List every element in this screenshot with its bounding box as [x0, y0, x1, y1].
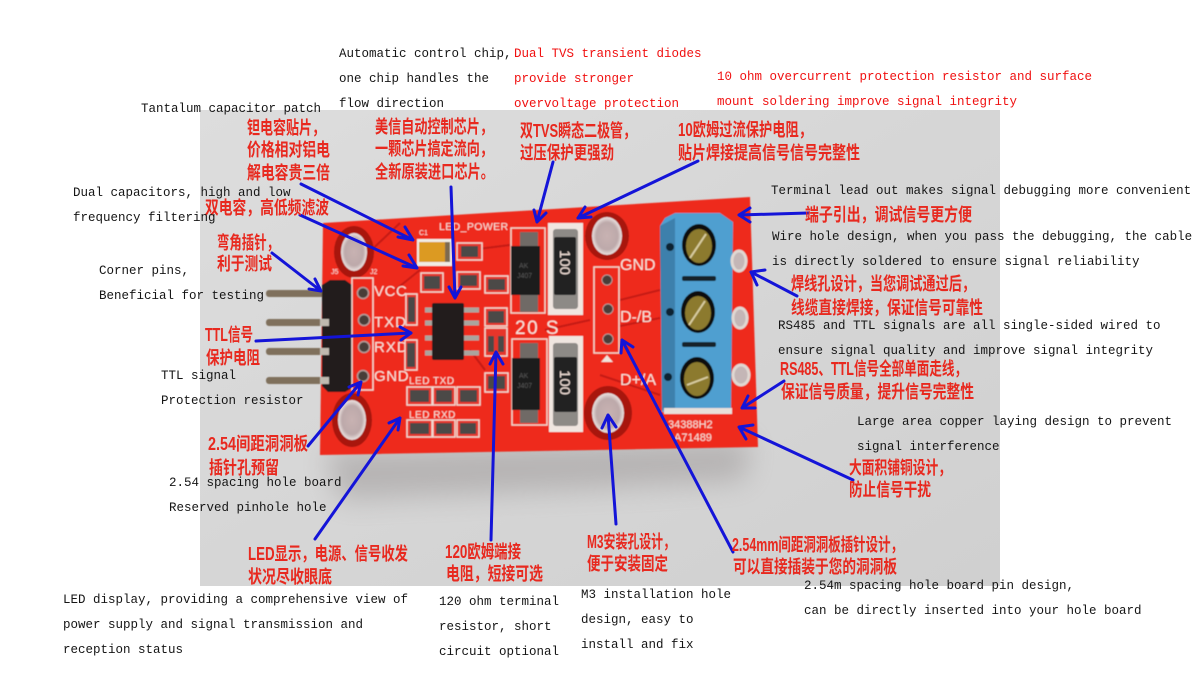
J2 silkscreen and pads: RXD: [374, 339, 409, 356]
red circuit board: [266, 197, 758, 455]
annotation: TVS: 双TVS瞬态二极管，: [520, 120, 636, 141]
annotation: TTL resistor: 保护电阻: [206, 348, 260, 368]
annotation: LED display: [248, 543, 408, 587]
J2 silkscreen and pads: J5: [331, 269, 338, 276]
caption: M3 hole: [581, 588, 731, 652]
arrow: control chip: [449, 187, 461, 298]
power resistors: 100: [556, 250, 573, 275]
TVS diodes: AK: [519, 373, 529, 380]
caption: hole board pins: Reserved pinhole hole: [169, 501, 327, 515]
caption: TTL resistor: [161, 369, 304, 408]
caption: control chip: Automatic control chip,: [339, 47, 512, 61]
TVS diodes: AK: [519, 263, 529, 270]
annotation: copper area: 防止信号干扰: [849, 479, 931, 500]
annotation: copper area: [849, 458, 951, 500]
J2 silkscreen and pads: J2: [370, 269, 378, 276]
annotation: hole board pins: 插针孔预留: [209, 457, 279, 478]
power resistors: 100: [556, 370, 573, 395]
caption: LED display: power supply and signal transmission and: [63, 618, 363, 632]
caption: copper area: signal interference: [857, 440, 1000, 454]
caption: TVS diodes: overvoltage protection: [514, 97, 679, 111]
annotation: RS485 routing: 保证信号质量，提升信号完整性: [781, 381, 974, 402]
arrow: dual capacitors: [300, 215, 417, 268]
annotation: 2.54mm pin design: [732, 535, 903, 577]
caption: control chip: one chip handles the: [339, 72, 489, 86]
annotation: hole board pins: [208, 434, 308, 478]
caption: TTL resistor: Protection resistor: [161, 394, 304, 408]
annotation: terminal resistor: [445, 541, 543, 584]
caption: hole board pins: [169, 476, 342, 515]
annotation: M3 hole: M3安装孔设计，: [587, 532, 675, 552]
annotation: control chip: [375, 116, 494, 182]
TVS diodes: [511, 228, 547, 425]
annotation: control chip: 一颗芯片搞定流向，: [375, 138, 493, 159]
caption: TVS diodes: Dual TVS transient diodes: [514, 47, 702, 61]
board silkscreen labels: 34388H2: [668, 419, 713, 431]
caption: control chip: flow direction: [339, 97, 444, 111]
tantalum capacitor: LED_POWER: [439, 221, 509, 233]
annotation: TVS: 过压保护更强劲: [520, 143, 614, 163]
caption: LED display: LED display, providing a comprehensive view of: [63, 593, 408, 607]
arrow: corner pins: [272, 253, 321, 291]
caption: overcurrent resistor: 10 ohm overcurrent protection resistor and surface: [717, 70, 1092, 84]
mounting holes: [332, 212, 632, 447]
annotation: wire hole: 线缆直接焊接，保证信号可靠性: [791, 297, 983, 318]
board silkscreen labels: GND: [620, 257, 656, 274]
annotation: RS485 routing: RS485、TTL信号全部单面走线，: [780, 358, 967, 379]
caption: terminal resistor: [439, 595, 559, 659]
annotation: terminal lead out: 端子引出，调试信号更方便: [805, 204, 972, 225]
annotation: RS485 routing: [780, 358, 974, 402]
board shadow: [325, 440, 750, 500]
board silkscreen labels: 20 S: [515, 318, 560, 339]
caption: 2.54m pin design: [804, 579, 1142, 618]
board silkscreen labels: LED RXD: [409, 410, 456, 421]
annotation: corner pins: 弯角插针，: [217, 232, 279, 253]
annotation: control chip: 美信自动控制芯片，: [375, 116, 493, 137]
wire solder holes: [732, 251, 749, 385]
power resistors: [548, 223, 583, 432]
annotation: terminal resistor: 120欧姆端接: [445, 541, 521, 562]
pin header: [266, 280, 352, 392]
TVS diodes: J407: [517, 273, 532, 280]
caption: control chip: [339, 47, 512, 111]
annotation: TVS: [520, 120, 636, 163]
caption: M3 hole: design, easy to: [581, 613, 694, 627]
caption: overcurrent resistor: mount soldering improve signal integrity: [717, 95, 1018, 109]
arrow: tantalum capacitor: [301, 184, 413, 240]
J2 silkscreen and pads: [331, 269, 409, 390]
photo background: [200, 110, 1000, 586]
red Chinese annotations: [205, 116, 983, 587]
annotation: TTL resistor: [205, 325, 260, 368]
caption: terminal resistor: circuit optional: [439, 645, 559, 659]
annotation: tantalum capacitor: 解电容贵三倍: [247, 162, 330, 183]
caption: dual capacitors: Dual capacitors, high and low: [73, 186, 291, 200]
annotation: M3 hole: [587, 532, 675, 574]
arrow: TVS diodes: [534, 162, 553, 222]
blue arrows: [256, 161, 853, 552]
small SMD parts: [405, 243, 508, 437]
caption: dual capacitors: frequency filtering: [73, 211, 216, 225]
arrow: TTL resistor: [256, 327, 411, 341]
annotation: wire hole: [791, 274, 983, 318]
arrow: 2.54mm pin design: [621, 340, 733, 552]
caption: corner pins: Corner pins,: [99, 264, 189, 278]
board silkscreen labels: [409, 257, 713, 444]
annotation: overcurrent resistor: [678, 119, 860, 163]
caption: terminal resistor: 120 ohm terminal: [439, 595, 559, 609]
caption: dual capacitors: [73, 186, 291, 225]
product photo: [200, 110, 1000, 586]
annotation: control chip: 全新原装进口芯片。: [375, 161, 494, 182]
caption: 2.54m pin design: can be directly inserted into your hole board: [804, 604, 1142, 618]
caption: LED display: [63, 593, 408, 657]
board silkscreen labels: LED TXD: [409, 376, 455, 387]
arrow: LED display: [315, 418, 400, 539]
arrow: M3 hole: [602, 415, 616, 524]
J2 silkscreen and pads: GND: [374, 368, 409, 385]
caption: terminal lead out: Terminal lead out makes signal debugging more convenient: [771, 184, 1191, 198]
annotation: LED display: 状况尽收眼底: [248, 566, 332, 587]
caption: 2.54m pin design: 2.54m spacing hole board pin design,: [804, 579, 1074, 593]
annotation: corner pins: 利于测试: [217, 254, 272, 274]
tantalum capacitor: [417, 221, 509, 266]
caption: terminal resistor: resistor, short: [439, 620, 552, 634]
annotation: LED display: LED显示，电源、信号收发: [248, 543, 408, 564]
transceiver chip: [425, 303, 479, 360]
annotation: wire hole: 焊线孔设计，当您调试通过后，: [791, 274, 975, 294]
board silkscreen labels: D-/B: [620, 309, 652, 326]
annotation: overcurrent resistor: 10欧姆过流保护电阻，: [678, 119, 812, 140]
annotation: overcurrent resistor: 贴片焊接提高信号信号完整性: [678, 142, 860, 163]
caption: wire hole: is directly soldered to ensure signal reliability: [772, 255, 1140, 269]
arrow: overcurrent resistor: [578, 161, 698, 218]
annotation: dual capacitors: 双电容，高低频滤波: [205, 197, 329, 218]
caption: overcurrent resistor: [717, 70, 1092, 109]
caption: copper area: [857, 415, 1172, 454]
caption: tantalum capacitor: Tantalum capacitor patch: [141, 102, 321, 116]
board silkscreen labels: D+/A: [620, 372, 656, 389]
caption: RS485 routing: [778, 319, 1161, 358]
J2 silkscreen and pads: VCC: [374, 283, 407, 300]
caption: hole board pins: 2.54 spacing hole board: [169, 476, 342, 490]
annotation: tantalum capacitor: 价格相对铝电: [247, 140, 330, 160]
arrow: RS485 routing: [742, 381, 784, 408]
arrow: wire hole: [751, 270, 797, 296]
caption: RS485 routing: RS485 and TTL signals are all single-sided wired to: [778, 319, 1161, 333]
annotation: M3 hole: 便于安装固定: [587, 553, 668, 574]
J2 silkscreen and pads: TXD: [374, 314, 407, 331]
arrow: copper area: [739, 425, 853, 480]
caption: TTL resistor: TTL signal: [161, 369, 236, 383]
annotation: copper area: 大面积铺铜设计，: [849, 458, 951, 478]
TVS diodes: J407: [517, 383, 532, 390]
arrow: terminal lead out: [739, 208, 808, 222]
tantalum capacitor: C1: [419, 230, 428, 237]
annotation: hole board pins: 2.54间距洞洞板: [208, 434, 308, 454]
caption: copper area: Large area copper laying design to prevent: [857, 415, 1172, 429]
annotation: tantalum capacitor: 钽电容贴片，: [247, 117, 325, 138]
caption: LED display: reception status: [63, 643, 183, 657]
arrow: terminal resistor: [490, 352, 503, 540]
caption: wire hole: Wire hole design, when you pass the debugging, the cable: [772, 230, 1192, 244]
annotation: terminal resistor: 电阻，短接可选: [446, 564, 543, 584]
arrow: hole board pins: [308, 382, 361, 446]
caption: M3 hole: M3 installation hole: [581, 588, 731, 602]
caption: M3 hole: install and fix: [581, 638, 694, 652]
pin pad box: [594, 267, 619, 362]
caption: TVS diodes: [514, 47, 702, 111]
caption: TVS diodes: provide stronger: [514, 72, 634, 86]
terminal block: [660, 213, 733, 414]
caption: wire hole: [772, 230, 1192, 269]
annotation: corner pins: [217, 232, 279, 274]
annotation: 2.54mm pin design: 可以直接插装于您的洞洞板: [733, 556, 897, 577]
annotation: TTL resistor: TTL信号: [205, 325, 253, 345]
annotation: 2.54mm pin design: 2.54mm间距洞洞板插针设计，: [732, 535, 903, 555]
caption: corner pins: Beneficial for testing: [99, 289, 264, 303]
board silkscreen labels: A71489: [674, 432, 712, 444]
caption: corner pins: [99, 264, 264, 303]
caption: RS485 routing: ensure signal quality and improve signal integrity: [778, 344, 1154, 358]
annotation: tantalum capacitor: [247, 117, 330, 183]
